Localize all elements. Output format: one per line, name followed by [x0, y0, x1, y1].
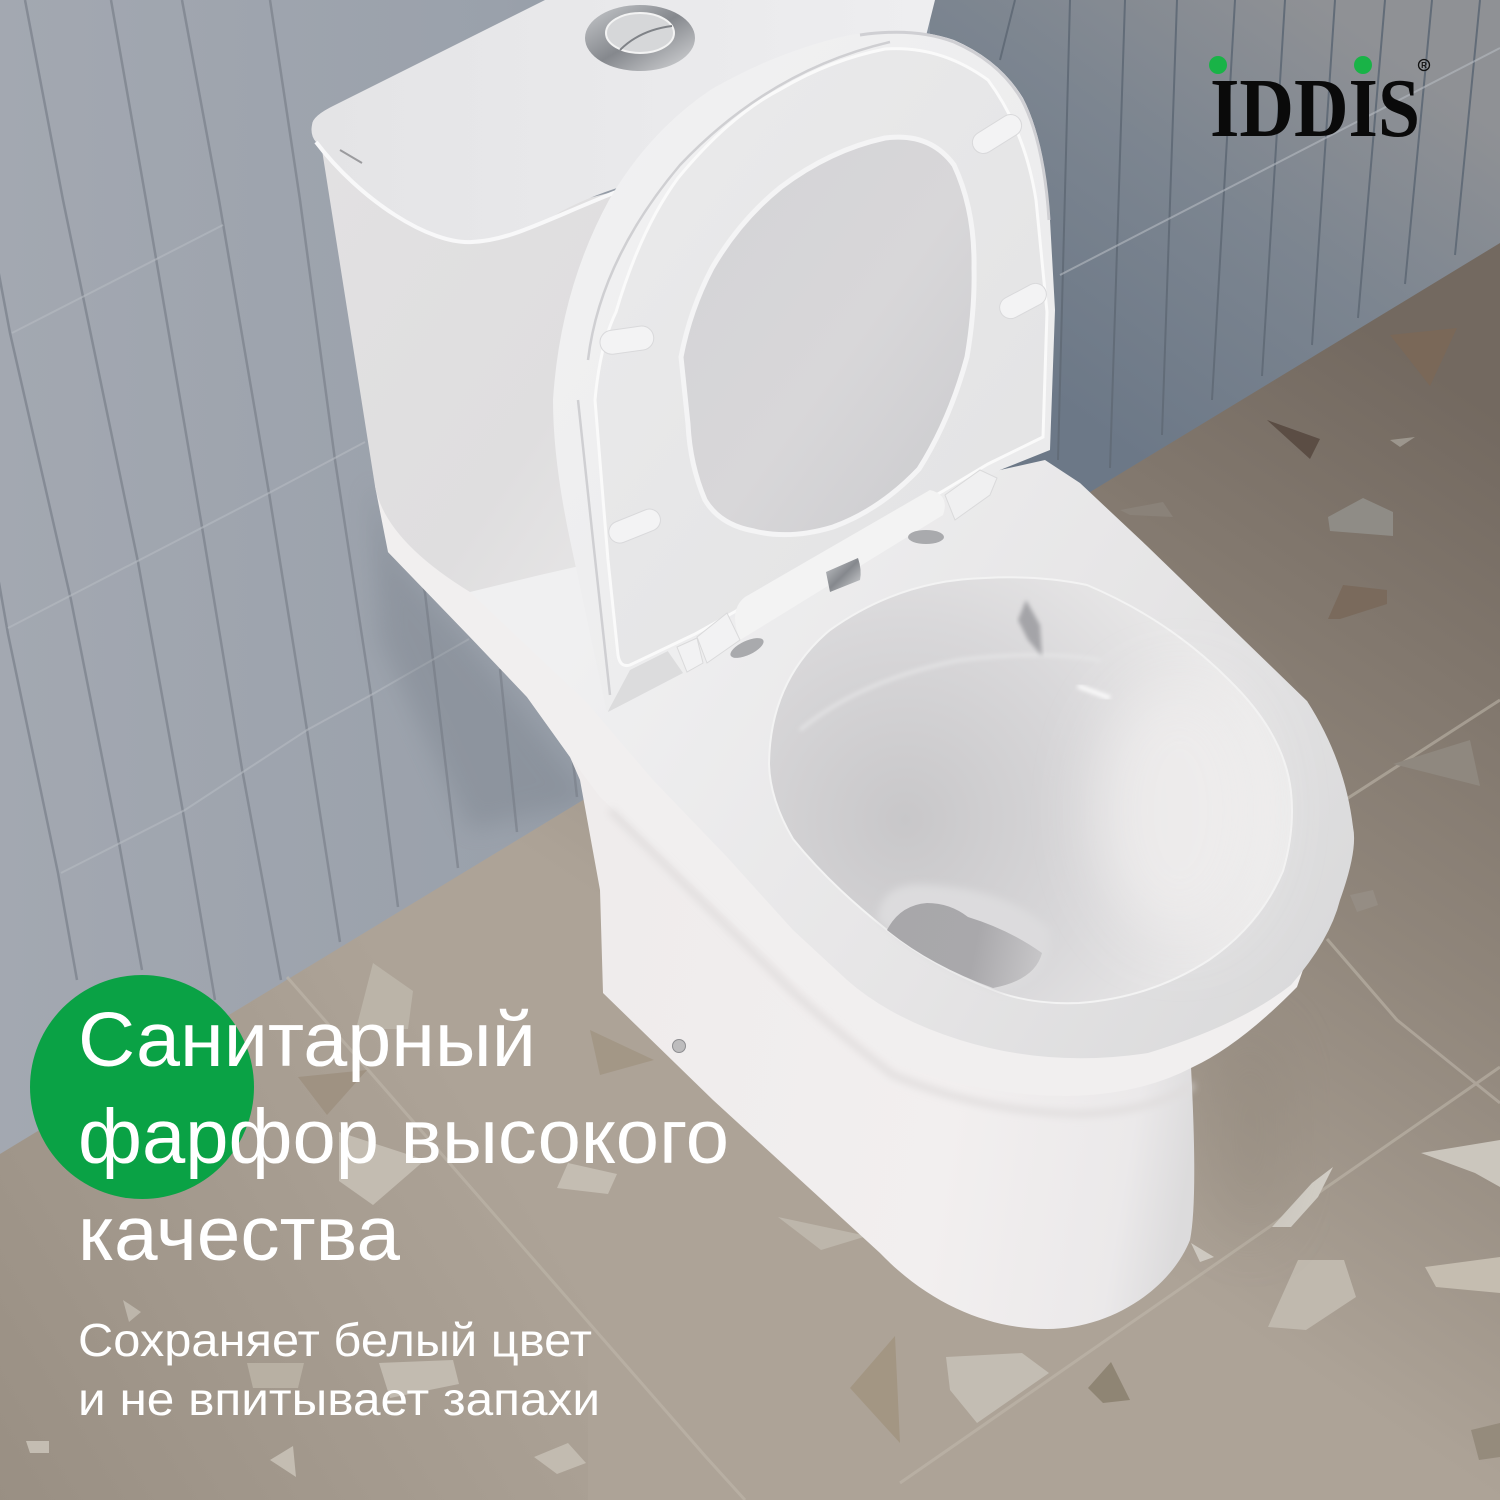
subheading: и не впитывает запахи: [78, 1373, 600, 1425]
heading: качества: [78, 1191, 400, 1277]
subheading: [78, 1314, 600, 1425]
logo: IDDIS: IDDIS: [1210, 62, 1420, 155]
hinge blocks: [677, 613, 740, 672]
chrome hinge posts: [908, 530, 944, 544]
heading: Санитарный: [78, 997, 536, 1083]
bowl rim outer band: [375, 486, 1353, 1096]
pedestal bolt: [672, 1040, 686, 1052]
water inlet: [1018, 600, 1042, 656]
subheading: Сохраняет белый цвет: [78, 1314, 592, 1366]
green accent circle: [30, 975, 254, 1199]
seat outer shaded edge: [860, 32, 1049, 220]
bowl deck and rim top surface: [470, 460, 1354, 1058]
toilet seat lid raised: [553, 31, 1055, 713]
toilet product: [312, 0, 1354, 1329]
shadow under seat: [608, 640, 683, 712]
rubber bumpers: [598, 110, 1050, 546]
hinge bar: [735, 490, 945, 640]
pedestal base: [388, 552, 1194, 1329]
terrazzo chips: [26, 328, 1500, 1477]
drain opening: [887, 903, 1042, 988]
cistern tank: [312, 0, 935, 650]
under-rim fold shading: [610, 810, 1193, 1114]
bowl upper lip shading: [800, 655, 1100, 730]
logo: IDDIS: R: [1421, 61, 1427, 70]
chrome release button: [826, 558, 861, 592]
wall: blue-grey tiles: [0, 0, 1500, 1160]
tiny brand mark on tank: [340, 150, 362, 163]
seat opening: [681, 137, 974, 535]
glaze highlight: [1078, 686, 1110, 698]
heading: фарфор высокого: [78, 1094, 729, 1180]
bowl interior: [769, 577, 1292, 1003]
flush button: [585, 5, 695, 71]
heading: [78, 997, 729, 1277]
light patch on right side of bowl: [1095, 680, 1265, 940]
drain collar: [878, 884, 1050, 992]
